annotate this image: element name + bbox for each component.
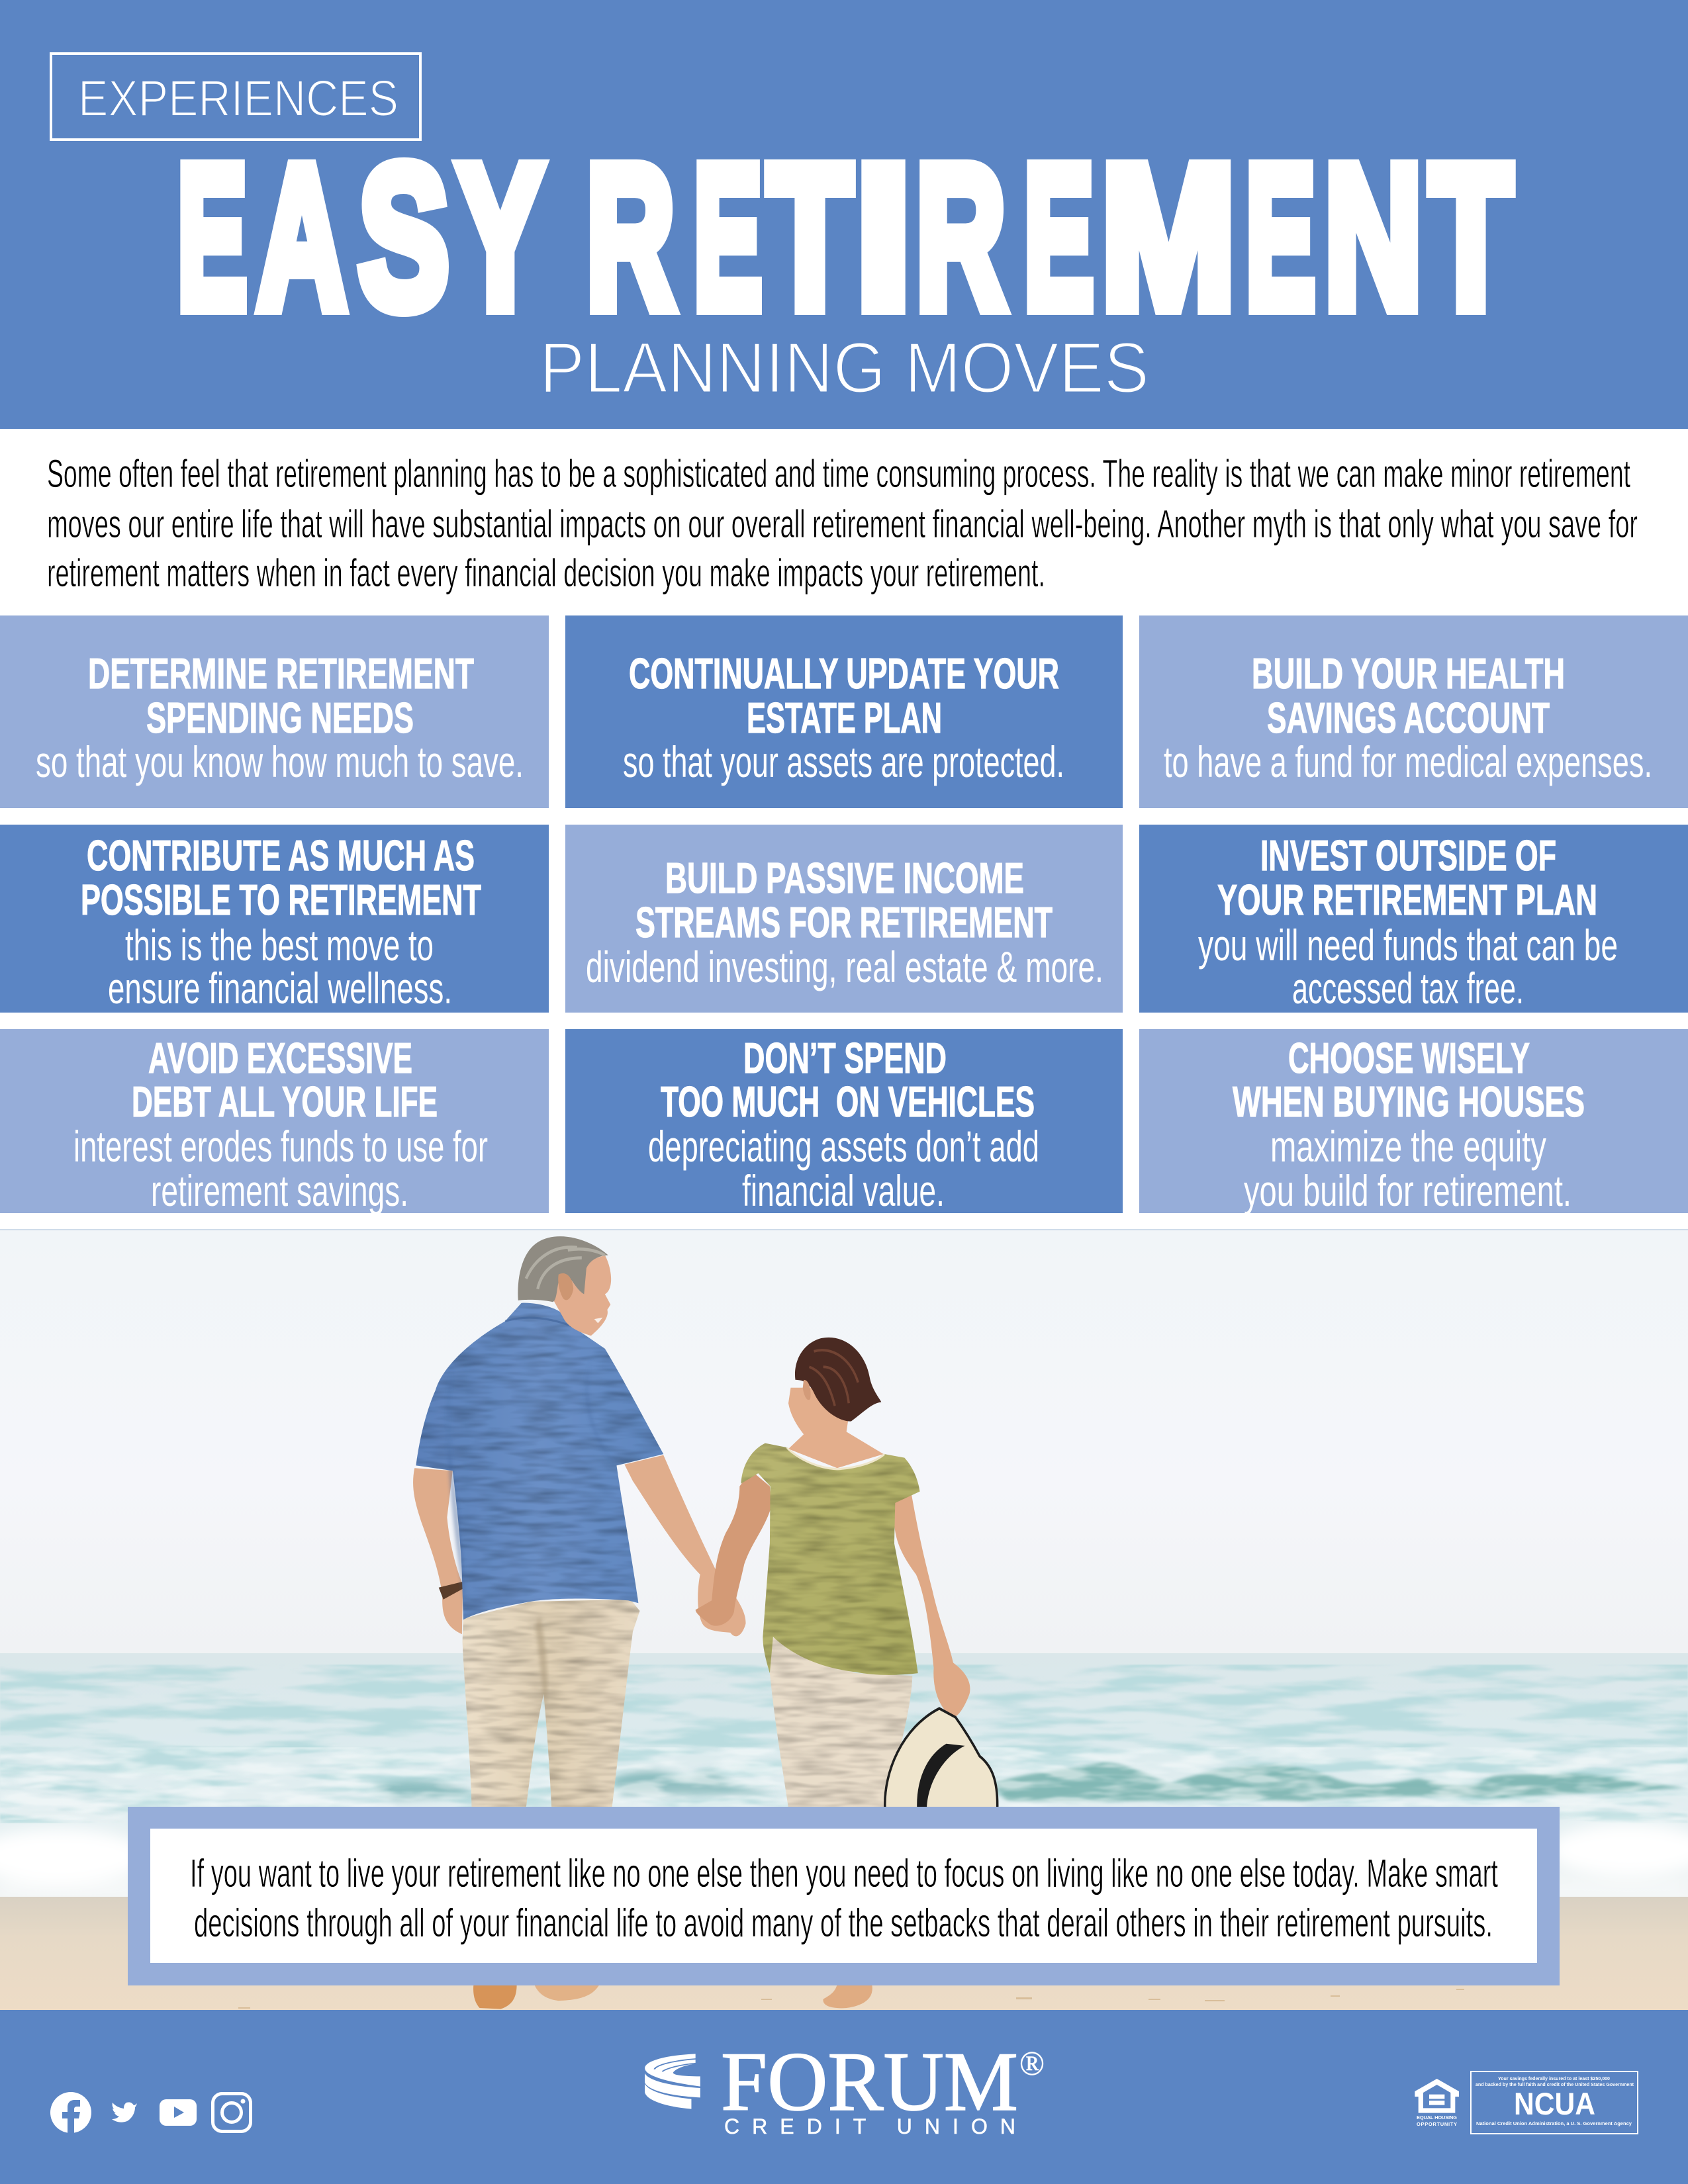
photo: couple walking on the beach xyxy=(0,1230,1688,2013)
sky xyxy=(0,1230,1688,1654)
panel: choose houses wisely: CHOOSE WISELY xyxy=(1288,1034,1530,1082)
panel: continually update estate plan: CONTINUALLY UPDATE YOUR xyxy=(629,649,1059,698)
icon: equal housing opportunity: OPPORTUNITY xyxy=(1417,2121,1457,2127)
panel: build passive income xyxy=(565,825,1123,1013)
panel: don't overspend on vehicles: TOO MUCH ON VEHICLES xyxy=(661,1077,1035,1126)
icon: instagram xyxy=(213,2094,250,2131)
title: S xyxy=(359,124,449,351)
panel: avoid excessive debt: interest erodes funds to use for xyxy=(73,1122,488,1171)
panel: contribute to retirement: this is the best move to xyxy=(125,921,434,970)
logo: forum credit union: CREDIT UNION xyxy=(724,2115,1015,2138)
logo mark xyxy=(645,2054,700,2109)
callout xyxy=(128,1807,1560,1985)
title: I xyxy=(856,124,911,351)
panel: avoid excessive debt xyxy=(0,1029,549,1215)
hat xyxy=(885,1708,998,1808)
badge: ncua: and backed by the full faith and credit of the United States Government xyxy=(1476,2081,1634,2087)
label box: experiences xyxy=(51,54,420,140)
title: T xyxy=(768,124,852,351)
logo: forum credit union: ® xyxy=(1019,2045,1045,2083)
panel: invest outside retirement plan: INVEST OUTSIDE OF xyxy=(1260,831,1556,880)
panel: build passive income: STREAMS FOR RETIREMENT xyxy=(635,898,1053,946)
panel: choose houses wisely: maximize the equity xyxy=(1270,1122,1546,1171)
footer xyxy=(0,2010,1688,2184)
woman xyxy=(696,1338,970,1808)
panel: determine retirement spending needs: so that you know how much to save. xyxy=(36,737,524,786)
icon: equal housing opportunity: EQUAL HOUSING xyxy=(1417,2115,1457,2120)
title: R xyxy=(916,124,1006,351)
panel: build passive income: BUILD PASSIVE INCOME xyxy=(665,854,1024,902)
panel: invest outside retirement plan: accessed tax free. xyxy=(1292,964,1524,1013)
title: E xyxy=(694,124,762,351)
icon: twitter xyxy=(112,2102,137,2122)
panel: build passive income: dividend investing, real estate & more. xyxy=(586,942,1103,991)
foam xyxy=(0,1823,1688,1895)
panel: avoid excessive debt: retirement savings. xyxy=(151,1166,408,1215)
badge: ncua xyxy=(1471,2071,1638,2134)
panel: don't overspend on vehicles: DON’T SPEND xyxy=(743,1034,947,1082)
title: E xyxy=(177,124,247,351)
panel: determine retirement spending needs: DETERMINE RETIREMENT xyxy=(88,649,474,698)
panel: don't overspend on vehicles xyxy=(565,1029,1123,1215)
title: N xyxy=(1325,124,1422,351)
icon: equal housing opportunity xyxy=(1415,2079,1459,2127)
intro paragraph: retirement matters when in fact every financial decision you make impacts your retirement. xyxy=(47,551,1045,595)
panel: avoid excessive debt: AVOID EXCESSIVE xyxy=(148,1034,412,1082)
wordmark: FORUM xyxy=(721,2036,1018,2128)
feet xyxy=(473,1985,872,2009)
title: A xyxy=(258,124,346,351)
panel: don't overspend on vehicles: depreciating assets don’t add xyxy=(648,1122,1039,1171)
badge: ncua: NCUA xyxy=(1514,2086,1595,2121)
logo: forum credit union xyxy=(645,2036,1045,2138)
sea xyxy=(0,1653,1688,1898)
panel: build health savings account: SAVINGS ACCOUNT xyxy=(1267,694,1550,742)
panel: continually update estate plan xyxy=(565,615,1123,808)
panel: don't overspend on vehicles: financial value. xyxy=(742,1166,945,1215)
panel: build health savings account xyxy=(1139,615,1688,808)
title: R xyxy=(586,124,675,351)
subtitle: PLANNING MOVES xyxy=(539,328,1149,408)
man xyxy=(413,1236,745,1808)
sand xyxy=(0,1897,1688,2013)
panel: contribute to retirement: ensure financial wellness. xyxy=(108,964,452,1013)
panel: determine retirement spending needs: SPENDING NEEDS xyxy=(146,694,414,742)
panel: continually update estate plan: ESTATE PLAN xyxy=(747,694,942,742)
badge: ncua: Your savings federally insured to at least $250,000 xyxy=(1498,2075,1610,2081)
panel: contribute to retirement xyxy=(0,825,549,1013)
intro paragraph xyxy=(47,452,1638,595)
panel: invest outside retirement plan xyxy=(1139,825,1688,1013)
title: E xyxy=(1246,124,1315,351)
panel: contribute to retirement: CONTRIBUTE AS MUCH AS xyxy=(87,831,475,880)
panel: choose houses wisely xyxy=(1139,1029,1688,1215)
icon: facebook xyxy=(50,2092,91,2133)
panel: avoid excessive debt: DEBT ALL YOUR LIFE xyxy=(132,1077,438,1126)
title: T xyxy=(1430,124,1512,351)
title: E xyxy=(1024,124,1094,351)
icon: youtube xyxy=(160,2099,197,2126)
label box: experiences: EXPERIENCES xyxy=(78,70,399,127)
panel: continually update estate plan: so that your assets are protected. xyxy=(623,737,1064,786)
panel: header banner xyxy=(0,0,1688,429)
panel: determine retirement spending needs xyxy=(0,615,549,808)
panel: contribute to retirement: POSSIBLE TO RETIREMENT xyxy=(81,876,481,924)
title: Y xyxy=(457,124,541,351)
badge: ncua: National Credit Union Administration, a U. S. Government Agency xyxy=(1476,2120,1632,2126)
title: M xyxy=(1102,124,1235,351)
